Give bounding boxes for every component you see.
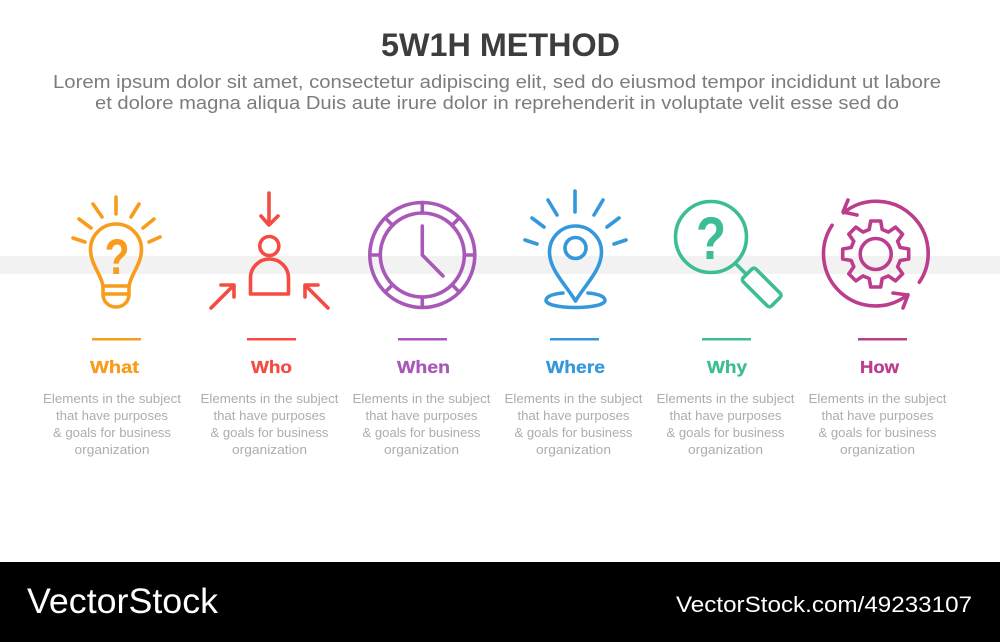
column: When: & goals for business [362, 425, 481, 440]
column: Where: organization [536, 442, 611, 457]
column: Who: Elements in the subject [200, 391, 339, 406]
column: How: that have purposes [822, 408, 934, 423]
icon: magnifying glass with question mark: ? [696, 205, 726, 272]
column: When: When [397, 357, 450, 377]
column: Why: Elements in the subject [656, 391, 795, 406]
column: How: organization [840, 442, 915, 457]
icon: light bulb with question mark [73, 197, 160, 307]
column: Why: Why [707, 357, 747, 377]
column: What: that have purposes [56, 408, 169, 423]
column: When: that have purposes [366, 408, 478, 423]
column: How: & goals for business [818, 425, 937, 440]
column: How: How [860, 357, 899, 377]
column: Who: organization [232, 442, 307, 457]
icon: magnifying glass with question mark [676, 202, 782, 308]
footer bar: VectorStock.com/49233107 [676, 592, 972, 617]
column: Why [656, 338, 795, 457]
footer bar [0, 562, 1000, 642]
title: 5W1H METHOD [381, 27, 620, 63]
column: When: organization [384, 442, 459, 457]
column: What: organization [74, 442, 150, 457]
icon: gear with cycle arrows [824, 200, 928, 308]
column: Where [504, 338, 643, 457]
column: How: Elements in the subject [808, 391, 947, 406]
subtitle text: et dolore magna aliqua Duis aute irure dolor in reprehenderit in voluptate velit esse sed do [95, 93, 899, 113]
icon: light bulb with question mark: ? [104, 229, 130, 285]
column: What: Elements in the subject [43, 391, 181, 406]
column: When: Elements in the subject [352, 391, 491, 406]
icon: clock [370, 202, 475, 308]
subtitle text: Lorem ipsum dolor sit amet, consectetur adipiscing elit, sed do eiusmod tempor incididunt ut labore [53, 72, 941, 92]
column: When [352, 338, 491, 457]
column: Where: Where [546, 357, 605, 377]
column: Where: Elements in the subject [504, 391, 643, 406]
subtitle text [53, 72, 941, 113]
column: What: What [90, 357, 139, 377]
column: Who [200, 338, 339, 457]
column: Why: that have purposes [670, 408, 782, 423]
column: What: & goals for business [53, 425, 171, 440]
icon: person with arrows [211, 193, 328, 308]
column: How [808, 338, 947, 457]
column: Who: that have purposes [214, 408, 326, 423]
icon: location pin [525, 191, 626, 308]
column: Why: & goals for business [666, 425, 785, 440]
column: Where: that have purposes [518, 408, 630, 423]
column: Why: organization [688, 442, 763, 457]
column: Who: & goals for business [210, 425, 329, 440]
column: Who: Who [251, 357, 292, 377]
column: What [43, 338, 181, 457]
footer bar: VectorStock [27, 582, 219, 621]
timeline band [0, 256, 1000, 274]
column: Where: & goals for business [514, 425, 633, 440]
